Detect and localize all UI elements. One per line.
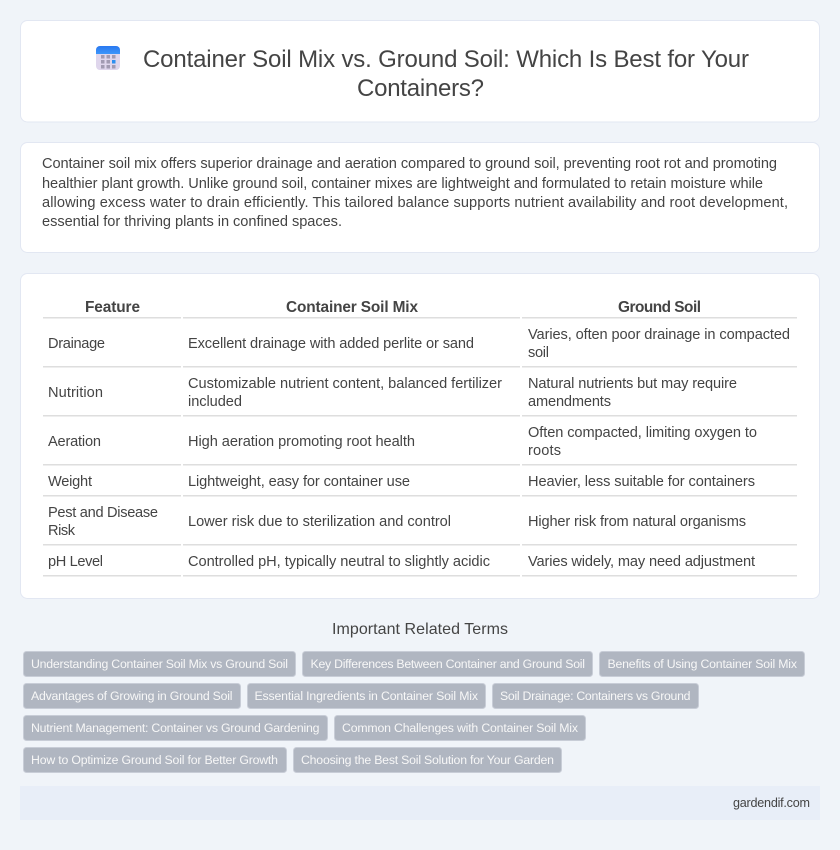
row: weight (48, 474, 755, 490)
heading: important related terms: Important Related Terms (332, 621, 508, 638)
tag: advantages: Advantages of Growing in Ground Soil (31, 689, 232, 703)
row: pH level: Controlled pH, typically neutral to slightly acidic (188, 554, 490, 570)
panel: comparison table (20, 274, 820, 598)
table header: Feature (85, 299, 140, 316)
text block: introduction: healthier plant growth. Unlike ground soil, container mixes are lightweight and formulated to retain moisture while (42, 176, 763, 192)
row: pest and disease risk: Higher risk from natural organisms (528, 514, 746, 530)
row: weight: Lightweight, easy for container use (188, 474, 410, 490)
panel: introduction (20, 142, 820, 252)
row: nutrition: Customizable nutrient content, balanced fertilizer (188, 376, 502, 392)
tag: key differences: Key Differences Between Container and Ground Soil (310, 657, 585, 671)
row: pest and disease risk: Lower risk due to sterilization and control (188, 514, 451, 530)
row: nutrition: Natural nutrients but may require (528, 376, 737, 392)
tag: soil drainage (492, 684, 698, 708)
row: aeration: High aeration promoting root health (188, 434, 415, 450)
tag: optimize ground soil: How to Optimize Ground Soil for Better Growth (31, 753, 278, 767)
tag: common challenges (334, 716, 586, 740)
row: drainage: Varies, often poor drainage in compacted (528, 327, 790, 343)
row: nutrition (48, 376, 737, 410)
tag: understanding container soil mix: Understanding Container Soil Mix vs Ground Soil (31, 657, 288, 671)
title: Container Soil Mix vs. Ground Soil: Which Is Best for Your (143, 46, 749, 73)
tag: common challenges: Common Challenges with Container Soil Mix (342, 721, 579, 735)
related term tags (24, 652, 804, 772)
title: Containers? (357, 75, 484, 102)
footer: gardendif.com (733, 796, 810, 810)
title (143, 46, 749, 102)
row: pH level: pH Level (48, 554, 103, 570)
row: nutrition: amendments (528, 394, 611, 410)
panel: header (20, 20, 820, 122)
tag: nutrient management: Nutrient Management: Container vs Ground Gardening (31, 721, 320, 735)
row: drainage: soil (528, 345, 549, 361)
icon: calendar (96, 46, 120, 70)
row: weight: Weight (48, 474, 92, 490)
text block: introduction: essential for thriving plants in confined spaces. (42, 214, 342, 230)
row: drainage: Drainage (48, 336, 105, 352)
tag: advantages (24, 684, 240, 708)
tag: nutrient management (24, 716, 328, 740)
table header: Ground Soil (618, 299, 701, 316)
row: pest and disease risk (48, 505, 746, 539)
tag: best soil solution: Choosing the Best Soil Solution for Your Garden (301, 753, 554, 767)
row: pest and disease risk: Risk (48, 523, 76, 539)
row: aeration: roots (528, 443, 561, 459)
footer (20, 786, 820, 820)
table header (85, 299, 701, 316)
row: pest and disease risk: Pest and Disease (48, 505, 158, 521)
tag: benefits: Benefits of Using Container Soil Mix (608, 657, 798, 671)
row: nutrition: Nutrition (48, 385, 103, 401)
row: nutrition: included (188, 394, 242, 410)
tag: essential ingredients (248, 684, 486, 708)
tag: soil drainage: Soil Drainage: Containers vs Ground (500, 689, 691, 703)
row: weight: Heavier, less suitable for containers (528, 474, 755, 490)
row: aeration: Aeration (48, 434, 101, 450)
tag: benefits (600, 652, 804, 676)
text block: introduction: allowing excess water to drain efficiently. This tailored balance supports nutrient availability and root development, (42, 195, 788, 211)
row: pH level (48, 554, 755, 570)
text block: introduction: Container soil mix offers superior drainage and aeration compared to ground soil, preventing root rot and promoting (42, 156, 777, 172)
row: drainage (48, 327, 790, 361)
row: aeration: Often compacted, limiting oxygen to (528, 425, 757, 441)
tag: best soil solution (294, 748, 562, 772)
tag: essential ingredients: Essential Ingredients in Container Soil Mix (254, 689, 479, 703)
row: drainage: Excellent drainage with added perlite or sand (188, 336, 474, 352)
row: pH level: Varies widely, may need adjustment (528, 554, 755, 570)
tag: key differences (302, 652, 592, 676)
tag: understanding container soil mix (24, 652, 296, 676)
table header: Container Soil Mix (286, 299, 418, 316)
row: aeration (48, 425, 757, 459)
text block: introduction (42, 156, 788, 230)
tag: optimize ground soil (24, 748, 286, 772)
